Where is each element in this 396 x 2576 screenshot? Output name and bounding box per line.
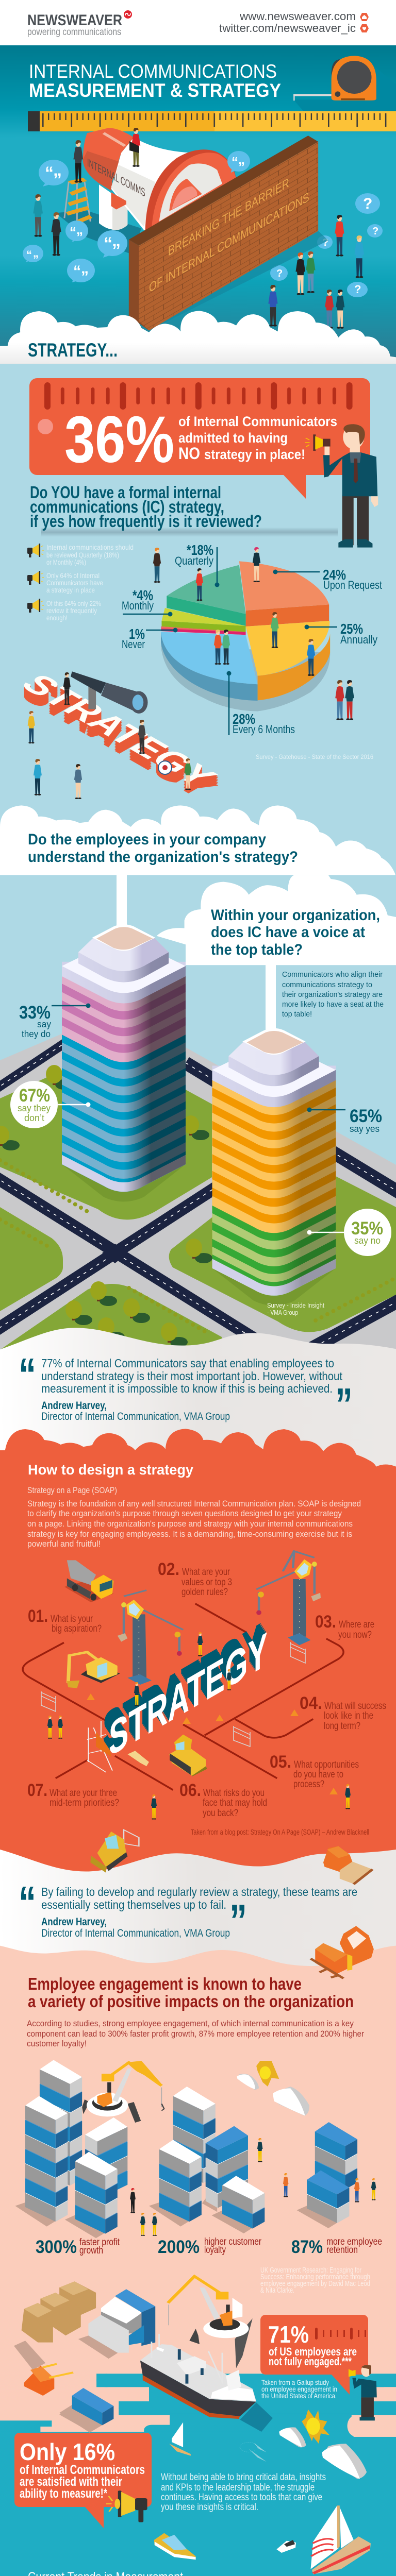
callout: only 16 percent (14, 2433, 152, 2528)
callout: only 16 percent: are satisfied with their (20, 2475, 122, 2489)
review tips list: be reviewed Quarterly (18%) (46, 551, 119, 559)
review tips list: Of this 64% only 22% (46, 600, 101, 607)
header logo: Newsweaver: NEWSWEAVER (27, 12, 122, 29)
small businessman with megaphone (349, 2365, 377, 2420)
engagement stats: 87% (291, 2237, 323, 2257)
question list: seven SOAP questions: face that may hold (203, 1798, 267, 1808)
quote: 77 percent (19, 1349, 353, 1431)
wall text: breaking the barrier: BREAKING THE BARRIER (168, 175, 289, 259)
text: aligned communicators: more likely to have a seat at the (282, 1000, 384, 1009)
hero background panel (0, 45, 396, 364)
lower boxes, containers and forklift (14, 2281, 155, 2433)
stat: 65 percent say yes (307, 1106, 382, 1134)
container stacks, crane and clouds (15, 2060, 357, 2238)
header contact links with icons: www.newsweaver.com (239, 10, 356, 23)
wall text: breaking the barrier: OF INTERNAL COMMUNICATIONS (149, 190, 309, 296)
text: without critical data (161, 2472, 326, 2513)
tower 1: employee understanding (62, 924, 186, 1201)
heading: formal IC strategy question: Do YOU have a formal internal (30, 483, 221, 502)
text: aligned communicators: Communicators who align their (282, 970, 383, 979)
question list: seven SOAP questions: Where are (339, 1619, 374, 1630)
question list: seven SOAP questions: 01. (28, 1606, 48, 1626)
review tips list: a strategy in place (46, 586, 95, 594)
text: engagement studies: component can lead to 300% faster profit growth, 87% more employee retention and 200% higher (27, 2029, 364, 2039)
engagement stats: 300% (36, 2237, 77, 2257)
engagement stats: loyalty (204, 2245, 226, 2256)
heading: employee engagement (28, 1974, 354, 2011)
question list: seven SOAP questions: long term? (324, 1721, 360, 1732)
quote: failing to develop: Andrew Harvey, (41, 1916, 107, 1928)
callout: 36 percent: admitted to having (178, 430, 288, 446)
callout: 71 percent not engaged: not fully engaged.*** (269, 2355, 352, 2368)
source note: UK government research: Success: Enhancing performance through (260, 2273, 370, 2281)
quote: 77 percent: measurement it is impossible to know if this is being achieved. (41, 1382, 333, 1395)
pie labels and leader lines: 25% (340, 621, 363, 637)
question list: seven SOAP questions: What opportunities (294, 1759, 359, 1770)
stat: 35 percent say no: 35% (351, 1218, 383, 1239)
question list: seven SOAP questions: 02. (158, 1560, 179, 1579)
header contact links with icons: twitter.com/newsweaver_ic (219, 22, 356, 35)
bubble quote marks and question marks: ” (76, 229, 83, 245)
bubble quote marks and question marks: ? (354, 283, 361, 296)
teal sea with shoreline (0, 2374, 396, 2576)
cargo ship (140, 2334, 273, 2432)
bubble quote marks and question marks (26, 154, 378, 296)
callout: only 16 percent: Only 16% (20, 2438, 115, 2465)
heading: formal IC strategy question: communications (IC) strategy, (30, 497, 224, 516)
big isometric word: strategy: STRATEGY (109, 1622, 268, 1767)
text: strategy on a page intro: powerful and fruitful! (27, 1539, 101, 1549)
cloud banner: strategy (0, 311, 396, 364)
header logo: Newsweaver (27, 10, 132, 38)
review tips list: Internal communications should (46, 544, 134, 551)
pie labels and leader lines: *18% (187, 542, 213, 558)
text: strategy on a page intro: strategy is key for engaging employeess. It is a demanding, time-consuming exercise but it is (27, 1529, 352, 1539)
bubble quote marks and question marks: ” (112, 241, 121, 260)
survey note: Survey - Gatehouse - State of the Sector 2016 (256, 753, 373, 760)
question list: seven SOAP questions: do you have to (293, 1769, 343, 1780)
stat: 65 percent say yes: say yes (350, 1124, 380, 1134)
text: without critical data: and KPIs to the leadership table, the struggle (161, 2482, 315, 2493)
header contact links with icons (219, 10, 369, 35)
question list: seven SOAP questions: 07. (27, 1781, 47, 1800)
text: engagement studies (27, 2019, 364, 2048)
bubble quote marks and question marks: ? (322, 237, 328, 248)
callout: only 16 percent: ability to measure!* (20, 2486, 107, 2501)
source note: UK government research (260, 2266, 370, 2295)
tape measure device (293, 56, 396, 111)
text: strategy on a page intro (27, 1485, 361, 1549)
callout: only 16 percent: of Internal Communicators (20, 2463, 145, 2477)
megaphone (56, 128, 236, 254)
question list: seven SOAP questions: big aspiration? (52, 1623, 102, 1634)
tower 2: voice at top table (212, 1028, 336, 1306)
text: aligned communicators: top table! (282, 1010, 312, 1019)
engagement stats: growth (79, 2245, 103, 2256)
text: strategy on a page intro: on a page. Linking the organization's purpose and strategy with your internal communications (27, 1519, 353, 1529)
construction vehicles and cranes (64, 1551, 321, 1776)
pie labels and leader lines: 28% (233, 711, 255, 727)
bubble quote marks and question marks: “ (45, 163, 54, 183)
cloud: voice at the top table (157, 875, 396, 965)
people on pie chart (153, 547, 354, 720)
bubble quote marks and question marks: “ (232, 154, 238, 170)
header logo: Newsweaver: powering communications (27, 27, 121, 38)
engagement stats: retention (326, 2245, 358, 2256)
speech bubbles (23, 151, 383, 297)
heading: voice at the top table: Within your organization, (211, 907, 380, 924)
bubble quote marks and question marks: “ (26, 248, 32, 261)
quote: 77 percent: Director of Internal Communication, VMA Group (41, 1411, 230, 1422)
engagement stats: higher customer (204, 2236, 262, 2247)
3D pie chart (161, 561, 330, 711)
question list: seven SOAP questions: values or top 3 (182, 1577, 232, 1588)
heading: how to design a strategy: How to design a strategy (28, 1462, 193, 1478)
bubble quote marks and question marks: “ (73, 263, 81, 280)
connector lines between questions (23, 1604, 343, 1790)
stat: 35 percent say no: say no (354, 1235, 381, 1246)
cloud: do the employees understand (0, 805, 395, 875)
question list: seven SOAP questions: What risks do you (203, 1788, 265, 1799)
pie labels and leader lines: Upon Request (323, 579, 382, 591)
bubble quote marks and question marks: ? (363, 195, 372, 212)
question list: seven SOAP questions: 04. (300, 1693, 322, 1713)
callout: 71 percent not engaged: 71% (268, 2321, 309, 2348)
text: without critical data: continues. Having access to tools that can give (161, 2492, 322, 2503)
quote: failing to develop: “ (19, 1877, 36, 1929)
heading: employee engagement: Employee engagement is known to have (28, 1974, 302, 1993)
businessman with megaphone (305, 424, 378, 548)
forklift and container on shore (24, 2364, 113, 2432)
title (29, 61, 281, 101)
pie labels and leader lines: Annually (340, 633, 377, 646)
isometric word: strategy: STRATEGY (12, 669, 226, 791)
callout: 36 percent: 36% (64, 403, 174, 477)
stat: 65 percent say yes: 65% (350, 1106, 382, 1126)
source note: Gallup: the United States of America. (261, 2392, 337, 2400)
text: engagement studies: According to studies, strong employee engagement, of which internal communication is a key (27, 2019, 354, 2028)
stat: 33 percent say they do (19, 1003, 91, 1039)
text: strategy on a page intro: Strategy is the foundation of any well structured Internal Communication plan. SOAP is designed (27, 1499, 361, 1509)
text: engagement studies: customer loyalty! (27, 2039, 87, 2048)
telescope (71, 671, 148, 714)
megaphone label: INTERNAL COMMS (87, 156, 145, 199)
stat: 33 percent say they do: they do (22, 1029, 51, 1039)
heading: employees understand strategy (28, 831, 298, 866)
callout: 36 percent: of Internal Communicators (178, 414, 337, 429)
question list: seven SOAP questions: you now? (338, 1630, 372, 1640)
source note: Gallup (261, 2378, 337, 2400)
text: strategy on a page intro: to clarify the organization's purpose through seven questions designed to get your strategy (27, 1509, 342, 1518)
source note: Gallup: on employee engagement in (261, 2385, 337, 2393)
bulldozer and forklift on wave (90, 1830, 372, 1884)
quote: failing to develop: Director of Internal Communication, VMA Group (41, 1927, 230, 1939)
bubble quote marks and question marks: ” (81, 268, 89, 285)
review tips list: review it frequently (46, 607, 97, 615)
engagement stats (36, 2236, 382, 2257)
question list: seven SOAP questions: 05. (270, 1752, 291, 1772)
text: strategy on a page intro: Strategy on a Page (SOAP) (27, 1485, 117, 1495)
stat: 33 percent say they do: say (37, 1019, 51, 1029)
pie labels and leader lines (122, 542, 382, 736)
callout: 71 percent not engaged (260, 2315, 368, 2395)
people among the stacks (130, 2138, 376, 2236)
orange section: how to design a strategy (0, 1429, 396, 1872)
quote panel background (0, 1328, 396, 1477)
onlookers (268, 215, 364, 329)
question list: seven SOAP questions: process? (293, 1779, 324, 1790)
quote: 77 percent: understand strategy is their most important job. However, without (41, 1369, 343, 1383)
question list: seven SOAP questions: you back? (203, 1808, 238, 1819)
people around isometric word (28, 672, 191, 799)
heading: formal IC strategy question: if yes how frequently is it reviewed? (30, 512, 262, 531)
text: without critical data: Without being able to bring critical data, insights (161, 2472, 326, 2483)
text: aligned communicators: communications strategy to (282, 980, 372, 989)
callout: 36 percent: NO (178, 444, 200, 463)
pie labels and leader lines: Quarterly (175, 554, 213, 567)
callout: 36 percent (29, 378, 370, 499)
question list: seven SOAP questions: What are your three (50, 1788, 117, 1799)
heading: employees understand strategy: Do the employees in your company (28, 831, 266, 848)
text: without critical data: you these insights is critical. (161, 2502, 258, 2513)
heading: formal IC strategy question (30, 483, 338, 537)
review tips list (27, 544, 134, 622)
survey note: inside insight: Survey - Inside Insight (267, 1301, 324, 1309)
pink section: employee engagement (0, 1946, 396, 2438)
bubble quote marks and question marks: ” (53, 170, 62, 190)
quote: 77 percent: ” (335, 1379, 353, 1431)
question list: seven SOAP questions: 03. (315, 1612, 336, 1632)
forklift with container (310, 1926, 374, 1978)
isometric city ground (0, 1007, 396, 1370)
quote: 77 percent: 77% of Internal Communicators say that enabling employees to (41, 1357, 334, 1370)
pie labels and leader lines: *4% (133, 587, 153, 603)
question list: seven SOAP questions (27, 1560, 386, 1819)
review tips list: Only 64% of Internal (46, 572, 100, 580)
quote: failing to develop: ” (229, 1895, 247, 1947)
stat: 67 percent say they don't (10, 1081, 91, 1128)
stat: 67 percent say they don't: don’t (24, 1113, 44, 1123)
bubble quote marks and question marks: ” (33, 253, 39, 266)
heading: voice at the top table (211, 907, 380, 958)
second quote panel background (0, 1834, 396, 1989)
title: INTERNAL COMMUNICATIONS (29, 61, 277, 82)
heading: employees understand strategy: understand the organization's strategy? (28, 849, 298, 866)
stat: 67 percent say they don't: say they (18, 1103, 51, 1113)
callout: 36 percent: strategy in place! (204, 447, 305, 462)
ruler (28, 111, 396, 131)
engagement stats: more employee (326, 2236, 382, 2247)
question list: seven SOAP questions: What is your (51, 1614, 93, 1624)
sea scene: boats, sun, clouds and dolphins (154, 2410, 371, 2574)
pie labels and leader lines: Never (122, 638, 145, 651)
brick wall (129, 135, 328, 331)
callout: 71 percent not engaged: of US employees are (269, 2345, 357, 2358)
text: aligned communicators: their organization's strategy are (282, 990, 383, 999)
stat: 67 percent say they don't: 67% (19, 1086, 50, 1106)
review tips list: Communicators have (46, 579, 103, 587)
cones, barriers and workers (41, 1632, 351, 1820)
bubble quote marks and question marks: ? (372, 226, 378, 237)
light blue section background (0, 364, 396, 1446)
bubble quote marks and question marks: ” (238, 159, 245, 175)
question list: seven SOAP questions: look like in the (324, 1710, 373, 1721)
question list: seven SOAP questions: golden rules? (182, 1587, 228, 1598)
ladder (64, 178, 91, 222)
heading: voice at the top table: does IC have a voice at (211, 924, 365, 941)
source note: UK government research: UK Government Research: Engaging for (260, 2266, 361, 2275)
pie labels and leader lines: Every 6 Months (233, 723, 295, 736)
pie labels and leader lines: 24% (323, 567, 346, 583)
quote: failing to develop: By failing to develop and regularly review a strategy, these teams are (41, 1885, 357, 1899)
stat: 35 percent say no (307, 1209, 391, 1256)
quote: failing to develop: essentially setting themselves up to fail. (41, 1898, 226, 1911)
question list: seven SOAP questions: 06. (179, 1781, 201, 1800)
source note: UK government research: & Nita Clarke. (260, 2286, 294, 2295)
survey note: inside insight: - VMA Group (267, 1309, 298, 1316)
source note: Gallup: Taken from a Gallup study (261, 2378, 329, 2386)
quote: 77 percent: Andrew Harvey, (41, 1400, 107, 1412)
quote: 77 percent: “ (19, 1349, 36, 1401)
bubble quote marks and question marks: “ (104, 234, 112, 253)
question list: seven SOAP questions: mid-term priorities? (50, 1798, 119, 1808)
survey note: inside insight (267, 1301, 324, 1316)
engagement stats: faster profit (79, 2237, 120, 2248)
quote: failing to develop (19, 1877, 357, 1947)
pie labels and leader lines: 1% (129, 626, 145, 642)
section heading: strategy: STRATEGY... (28, 340, 118, 361)
people around megaphone (33, 128, 140, 256)
heading: voice at the top table: the top table? (211, 941, 303, 958)
pie labels and leader lines: Monthly (122, 599, 154, 612)
review tips list: or Monthly (4%) (46, 558, 86, 566)
stat: 33 percent say they do: 33% (19, 1003, 51, 1023)
second crane (168, 2276, 253, 2368)
connector stems (117, 874, 276, 1031)
bubble quote marks and question marks: ? (276, 268, 283, 279)
engagement stats: 200% (158, 2237, 200, 2257)
review tips list: enough! (46, 614, 68, 622)
title: MEASUREMENT & STRATEGY (29, 80, 281, 101)
bubble quote marks and question marks: “ (70, 224, 76, 240)
question list: seven SOAP questions: What are your (182, 1567, 230, 1578)
text: aligned communicators (282, 970, 384, 1019)
